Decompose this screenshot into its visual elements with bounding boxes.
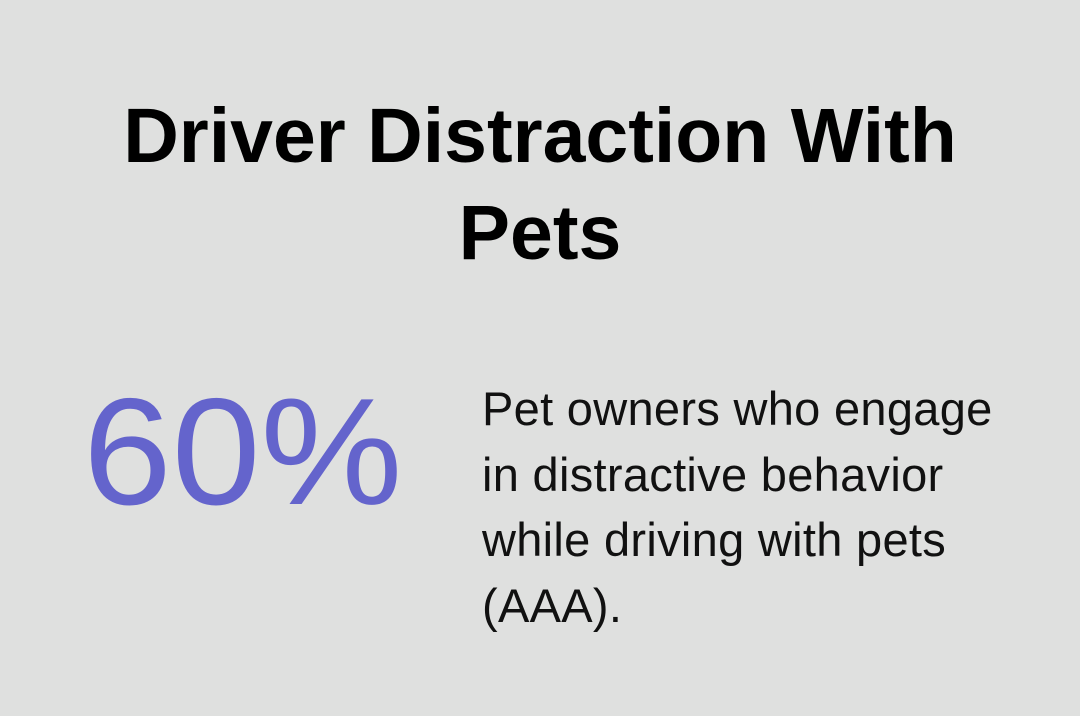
stat description: (AAA). — [482, 578, 622, 632]
title — [123, 93, 957, 276]
title: Driver Distraction With — [123, 93, 957, 179]
stat description: in distractive behavior — [482, 448, 943, 500]
stat description: while driving with pets — [482, 513, 946, 566]
title: Pets — [459, 190, 621, 276]
stat description — [482, 382, 993, 632]
stat number: 60% — [83, 367, 402, 537]
stat description: Pet owners who engage — [482, 382, 993, 435]
